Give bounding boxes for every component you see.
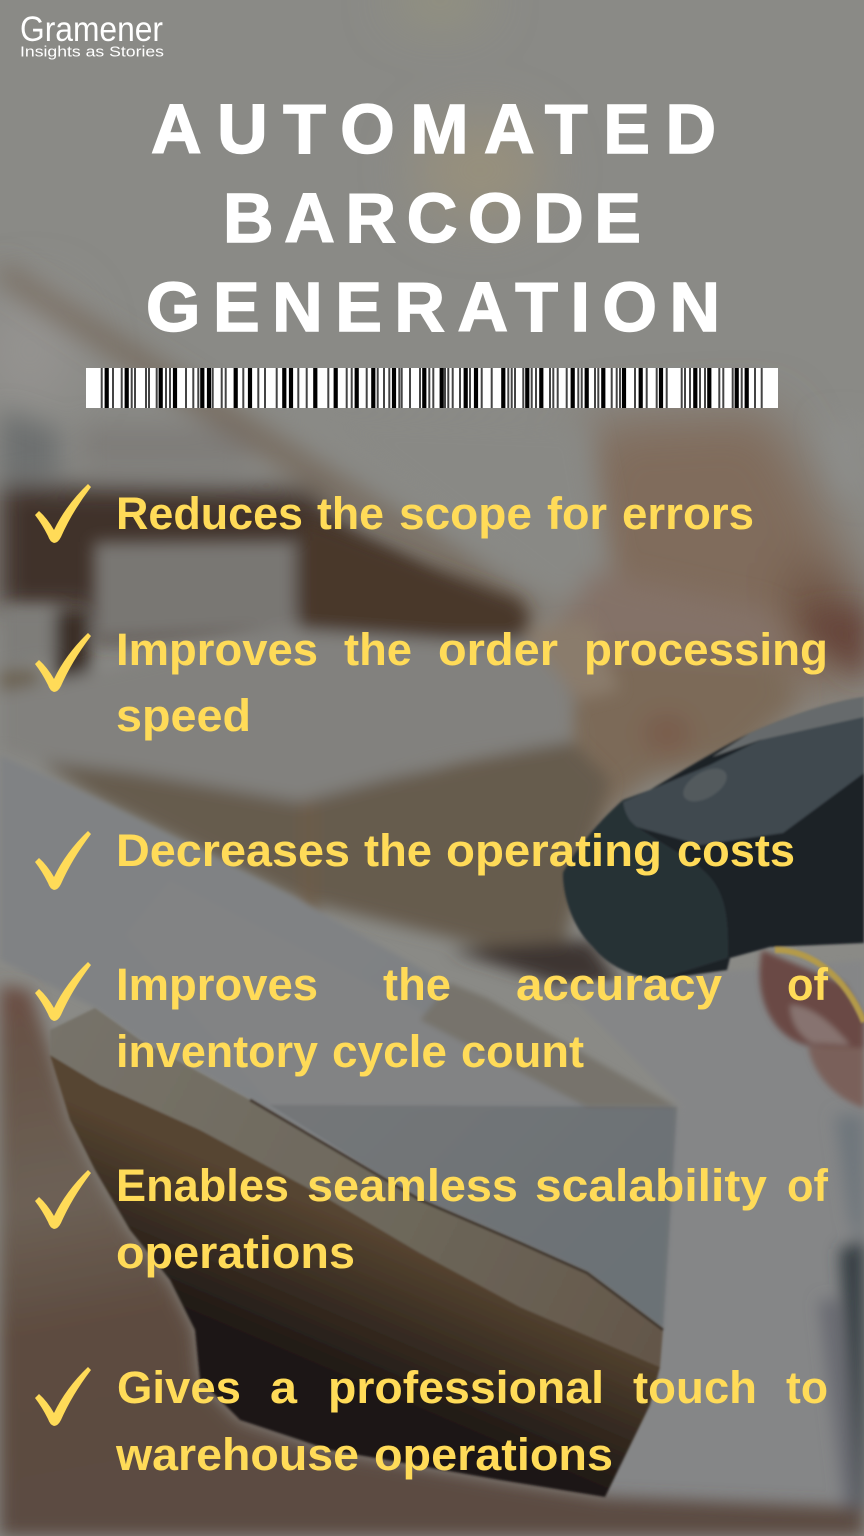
box interior [50, 1055, 660, 1497]
text: professional touch: to [786, 1362, 828, 1413]
benefit 4 [35, 959, 829, 1077]
text: professional touch: operations [374, 1429, 613, 1480]
text: professional touch: touch [633, 1362, 757, 1413]
benefit 2 [35, 624, 828, 741]
text: operating costs: the [364, 825, 432, 876]
fingers on scanner [808, 1045, 864, 1108]
text: reduces errors: errors [622, 488, 754, 539]
text: inventory accuracy: cycle [332, 1026, 447, 1077]
cardboard strip [50, 1008, 663, 1367]
text: order processing speed: order [438, 624, 558, 675]
text: order processing speed: Improves [116, 624, 318, 675]
text: operating costs: Decreases [116, 825, 350, 876]
icon: check mark [35, 831, 91, 890]
text: reduces errors: Reduces [116, 488, 303, 539]
logo: Gramener: Insights as Stories [20, 44, 164, 60]
logo: Gramener: Gramener [20, 10, 163, 49]
benefit 6 [35, 1362, 828, 1480]
text: scalability: of [787, 1160, 829, 1211]
text: operating costs: costs [677, 825, 795, 876]
icon: check mark [35, 633, 91, 692]
title: GENERATION [146, 268, 720, 346]
text: professional touch: Gives [117, 1362, 241, 1413]
text: professional touch: a [270, 1362, 298, 1413]
text: scalability: scalability [535, 1160, 767, 1211]
icon: check mark [35, 962, 91, 1021]
text: professional touch: professional [328, 1362, 604, 1413]
text: order processing speed: speed [116, 690, 251, 741]
benefit 3 [35, 825, 795, 890]
text: inventory accuracy: count [461, 1026, 584, 1077]
title: AUTOMATED [151, 90, 716, 168]
benefit 5 [35, 1160, 829, 1278]
title [146, 90, 720, 346]
text: inventory accuracy: Improves [116, 959, 318, 1010]
text: professional touch: warehouse [115, 1429, 359, 1480]
text: inventory accuracy: accuracy [516, 959, 722, 1010]
hand holding box [0, 985, 864, 1536]
scanner body [563, 697, 864, 980]
benefit 1 [35, 484, 754, 543]
icon: check mark [35, 484, 91, 543]
text: inventory accuracy: the [383, 959, 451, 1010]
text: reduces errors: scope [399, 488, 532, 539]
text: inventory accuracy: of [787, 959, 829, 1010]
text: scalability: Enables [116, 1160, 289, 1211]
barcode [86, 368, 778, 408]
text: inventory accuracy: inventory [116, 1026, 318, 1077]
text: scalability: operations [116, 1227, 355, 1278]
text: operating costs: operating [446, 825, 662, 876]
icon: check mark [35, 1170, 91, 1229]
title: BARCODE [223, 179, 641, 257]
text: scalability: seamless [307, 1160, 518, 1211]
text: order processing speed: the [344, 624, 412, 675]
icon: check mark [35, 1367, 91, 1426]
text: reduces errors: for [547, 488, 607, 539]
text: reduces errors: the [317, 488, 384, 539]
text: order processing speed: processing [584, 624, 828, 675]
